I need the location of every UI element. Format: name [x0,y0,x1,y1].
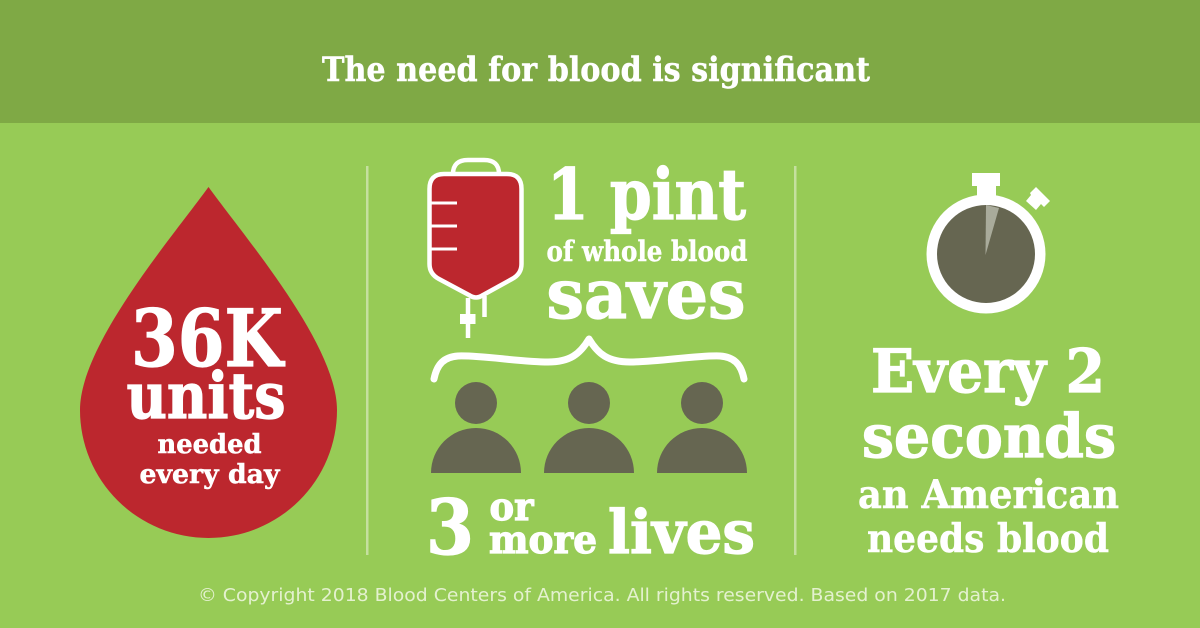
header band [0,0,1200,123]
label: or more: more [489,517,597,562]
label: units: units [126,359,286,434]
label: an American: an American [858,472,1119,518]
label: of whole blood: of whole blood [546,235,748,268]
label: needs blood: needs blood [867,516,1109,562]
label: or more [489,484,597,562]
label: seconds: seconds [862,402,1116,472]
icon: blood drop [80,187,337,538]
panel: 36K units [80,187,337,538]
stat: Every 2: Every 2 [871,337,1105,407]
stat: 3: 3 [426,483,474,572]
panel: every 2 seconds [858,173,1119,562]
label: needed: needed [158,430,262,460]
label: lives: lives [608,498,755,568]
stat: 1 pint: 1 pint [547,153,746,236]
label: every day: every day [140,460,280,490]
copyright footer: © Copyright 2018 Blood Centers of America. All rights reserved. Based on 2017 data. [198,585,1006,606]
icon: curly brace [434,339,744,379]
title: The need for blood is significant [322,50,870,90]
stat: 36K: 36K [131,292,286,385]
label: or more: or [490,484,534,529]
icon: blood bag [430,160,522,338]
icon: three people [431,382,747,473]
label: saves: saves [546,255,746,335]
panel: 1 pint [426,153,755,572]
icon: stopwatch [926,173,1050,314]
